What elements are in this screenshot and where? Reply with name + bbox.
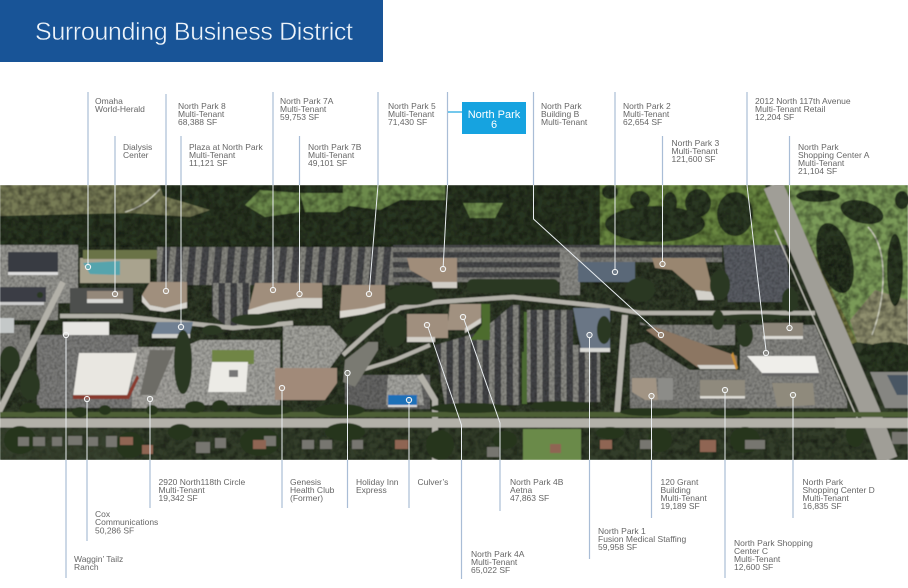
grass field left bbox=[0, 185, 210, 217]
Cox building bbox=[73, 353, 139, 399]
callout: North Park 7B bbox=[297, 136, 362, 297]
callout: Genesis Health Club: Health Club bbox=[290, 485, 335, 495]
white building with lawn bbox=[208, 350, 254, 392]
callout: 2012 North 117th Avenue: Multi-Tenant Retail bbox=[755, 104, 826, 114]
golf course bbox=[770, 185, 908, 350]
centre parking bbox=[435, 305, 520, 405]
lawn by 4B bbox=[470, 304, 490, 340]
callout: 2920 North 118th Circle: 19,342 SF bbox=[158, 493, 198, 503]
callout: 120 Grant Building: Multi-Tenant bbox=[660, 493, 707, 503]
Holiday Inn bbox=[343, 342, 378, 387]
callout: North Park 4A: Multi-Tenant bbox=[471, 557, 518, 567]
north park 6 bbox=[407, 258, 457, 288]
callout: North Park 6 highlighted: 6 bbox=[491, 119, 497, 131]
callout: Culver's: Culver’s bbox=[418, 477, 448, 487]
north park 3 bbox=[652, 258, 714, 300]
parking texture bbox=[0, 245, 850, 410]
pool building bbox=[80, 250, 157, 283]
callout: 2012 North 117th Avenue: 2012 North 117th Avenue bbox=[755, 96, 851, 106]
callout: North Park 7B: 49,101 SF bbox=[308, 158, 347, 168]
callout: Holiday Inn Express: Holiday Inn bbox=[356, 477, 399, 487]
callout: North Park 3 bbox=[660, 136, 719, 267]
callout: North Park Shopping Center A: Shopping Center A bbox=[798, 150, 870, 160]
callout: North Park Building B: Multi-Tenant bbox=[541, 117, 588, 127]
grass north east bbox=[600, 185, 790, 245]
callout: Plaza at North Park: 11,121 SF bbox=[189, 158, 228, 168]
callout: Cox Communications: 50,286 SF bbox=[95, 526, 134, 536]
callout: North Park 7B: Multi-Tenant bbox=[308, 150, 355, 160]
callout: North Park 1: 59,958 SF bbox=[598, 542, 637, 552]
north park building B bbox=[578, 262, 635, 282]
callout: 2920 North 118th Circle: 2920 North118th Circle bbox=[158, 477, 246, 487]
roads bbox=[0, 185, 908, 460]
callout: Waggin' Tailz Ranch: Waggin’ Tailz bbox=[74, 554, 123, 564]
callout: North Park 4A bbox=[424, 322, 525, 579]
foliage texture bbox=[0, 185, 908, 460]
long brown building bbox=[646, 327, 738, 370]
east parking lot bbox=[723, 245, 792, 302]
callout: North Park 4B: North Park 4B bbox=[510, 477, 564, 487]
callout: North Park 3: Multi-Tenant bbox=[672, 146, 718, 156]
callout: North Park 8: North Park 8 bbox=[178, 101, 226, 111]
callout: 120 Grant Building: 19,189 SF bbox=[660, 501, 700, 511]
callout: North Park Shopping Center D: Shopping Center D bbox=[802, 485, 875, 495]
callout: Genesis Health Club bbox=[279, 385, 335, 508]
callout: North Park 4A: North Park 4A bbox=[471, 549, 525, 559]
tree clumps north east bbox=[602, 185, 753, 242]
callout: North Park 8 bbox=[163, 94, 226, 294]
callout: Culver's bbox=[406, 397, 448, 508]
2920 building bbox=[140, 350, 174, 395]
Culver's bbox=[388, 395, 417, 407]
Waggin Tailz building bbox=[63, 322, 109, 335]
callout: North Park Shopping Center D bbox=[790, 392, 875, 518]
callout: 2012 North 117th Avenue bbox=[747, 92, 851, 356]
callout: North Park 2: 62,654 SF bbox=[623, 117, 662, 127]
callout: 2920 North 118th Circle: Multi-Tenant bbox=[158, 485, 205, 495]
north park 8 bbox=[142, 282, 187, 312]
callout: Omaha World-Herald: Omaha bbox=[95, 96, 123, 106]
callout: North Park Shopping Center A: Multi-Tenant bbox=[798, 158, 845, 168]
callout: North Park 1: Fusion Medical Staffing bbox=[598, 534, 686, 544]
callout: North Park 4B: Aetna bbox=[510, 485, 532, 495]
callout: North Park 2 bbox=[612, 92, 671, 275]
callout: Omaha World-Herald: World-Herald bbox=[95, 104, 145, 114]
callout: North Park 4B: 47,863 SF bbox=[510, 493, 549, 503]
callout: North Park 7B: North Park 7B bbox=[308, 142, 362, 152]
vegetation base bbox=[0, 185, 908, 460]
callout: North Park 4A: 65,022 SF bbox=[471, 565, 510, 575]
lots near shopping centres bbox=[740, 325, 847, 408]
callout: Genesis Health Club: Genesis bbox=[290, 477, 321, 487]
parking east of centre bbox=[527, 310, 600, 402]
callout: North Park 6 highlighted: North Park bbox=[468, 109, 521, 121]
callout: Plaza at North Park bbox=[178, 136, 263, 330]
north parking lot bbox=[157, 247, 400, 285]
callout: North Park Shopping Center C: Multi-Tenant bbox=[734, 554, 781, 564]
callout: Waggin' Tailz Ranch bbox=[63, 332, 123, 578]
header banner bbox=[0, 0, 383, 62]
callout: North Park 1: North Park 1 bbox=[598, 526, 646, 536]
callout: North Park 3: North Park 3 bbox=[672, 138, 719, 148]
north park 4A bbox=[407, 314, 448, 342]
callout: Waggin' Tailz Ranch: Ranch bbox=[74, 562, 99, 572]
callout: 120 Grant Building bbox=[649, 393, 707, 518]
shopping center A bbox=[763, 323, 803, 339]
callout: North Park Shopping Center C: North Park Shopping bbox=[734, 538, 813, 548]
callout: North Park 7A bbox=[270, 92, 334, 293]
golf course trees bbox=[796, 190, 908, 374]
callout: North Park Shopping Center D: Multi-Tenant bbox=[802, 493, 849, 503]
north park 7A bbox=[248, 283, 322, 316]
callout: 120 Grant Building: Building bbox=[660, 485, 691, 495]
west lot low bbox=[0, 325, 30, 360]
tree clusters amid the lots bbox=[0, 270, 798, 404]
shopping center D bbox=[772, 383, 815, 407]
north park 7B bbox=[340, 285, 385, 318]
callout: North Park Shopping Center A bbox=[787, 136, 870, 331]
north park 4B bbox=[447, 304, 481, 333]
callout: North Park 3: 121,600 SF bbox=[672, 154, 715, 164]
callout: North Park Shopping Center C bbox=[722, 387, 813, 578]
grass patches bbox=[245, 185, 503, 218]
callout: Cox Communications: Cox bbox=[95, 509, 111, 519]
aerial photograph of the business district bbox=[0, 185, 908, 460]
callout: Plaza at North Park: Multi-Tenant bbox=[189, 150, 236, 160]
callout: North Park Shopping Center C: Center C bbox=[734, 546, 768, 556]
callout: North Park 5: North Park 5 bbox=[388, 101, 436, 111]
callout: Cox Communications: Communications bbox=[95, 517, 158, 527]
callout: North Park 7A: Multi-Tenant bbox=[280, 104, 327, 114]
callout: North Park 6 highlighted bbox=[440, 92, 526, 272]
callout: Plaza at North Park: Plaza at North Park bbox=[189, 142, 263, 152]
dialysis center bbox=[70, 288, 133, 313]
neighborhood south of road bbox=[0, 423, 908, 460]
callout: Dialysis Center bbox=[112, 136, 152, 297]
north park 1 bbox=[573, 308, 610, 352]
callout: Holiday Inn Express bbox=[345, 370, 399, 508]
callout: North Park 4B bbox=[460, 314, 564, 511]
west parking lot bbox=[0, 245, 78, 303]
callout: North Park 1 bbox=[587, 332, 686, 559]
callout: North Park Shopping Center D: North Park bbox=[802, 477, 844, 487]
callout: North Park Building B: Building B bbox=[541, 109, 580, 119]
callout: 2012 North 117th Avenue: 12,204 SF bbox=[755, 112, 794, 122]
callout: North Park 5: 71,430 SF bbox=[388, 117, 427, 127]
callout: 120 Grant Building: 120 Grant bbox=[660, 477, 699, 487]
callout: North Park 5: Multi-Tenant bbox=[388, 109, 435, 119]
callout: North Park Shopping Center D: 16,835 SF bbox=[802, 501, 842, 511]
parking rows centre and east bbox=[393, 245, 565, 282]
callout: North Park Shopping Center C: 12,600 SF bbox=[734, 562, 773, 572]
callout: North Park 7A: North Park 7A bbox=[280, 96, 334, 106]
callout: North Park Building B bbox=[534, 92, 664, 338]
callout: North Park 5 bbox=[366, 92, 436, 297]
callout: North Park 2: Multi-Tenant bbox=[623, 109, 670, 119]
callout: North Park 2: North Park 2 bbox=[623, 101, 671, 111]
west dark buildings bbox=[0, 252, 58, 333]
callout: Holiday Inn Express: Express bbox=[356, 485, 387, 495]
north east intersection road bbox=[835, 418, 908, 428]
trees and verge along main road bbox=[0, 400, 908, 417]
callout: North Park Building B: North Park bbox=[541, 101, 582, 111]
Genesis building bbox=[275, 368, 337, 400]
120 Grant bbox=[632, 378, 658, 400]
callout: North Park 8: Multi-Tenant bbox=[178, 109, 225, 119]
lot by white building bbox=[185, 340, 280, 405]
callout: North Park Shopping Center A: North Park bbox=[798, 142, 839, 152]
callout: Cox Communications bbox=[84, 396, 158, 541]
callout: 2920 North 118th Circle bbox=[147, 396, 246, 508]
callout: Dialysis Center: Dialysis bbox=[123, 142, 152, 152]
shopping center C bbox=[700, 380, 745, 398]
building north east corner bbox=[887, 375, 908, 395]
callout: North Park 7A: 59,753 SF bbox=[280, 112, 319, 122]
road markings bbox=[775, 230, 908, 423]
plaza building bbox=[152, 322, 193, 338]
callout: North Park 8: 68,388 SF bbox=[178, 117, 217, 127]
tree band bbox=[0, 185, 908, 247]
callout: North Park Shopping Center A: 21,104 SF bbox=[798, 166, 837, 176]
lot between bbox=[283, 326, 347, 368]
title: Surrounding Business District bbox=[35, 18, 353, 46]
callout: Dialysis Center: Center bbox=[123, 150, 149, 160]
white retail building 2012 bbox=[747, 356, 819, 376]
callout: Omaha World-Herald bbox=[85, 92, 145, 270]
lot by Cox bbox=[37, 335, 138, 408]
cart path bbox=[868, 227, 883, 335]
callout: Genesis Health Club: (Former) bbox=[290, 493, 323, 503]
